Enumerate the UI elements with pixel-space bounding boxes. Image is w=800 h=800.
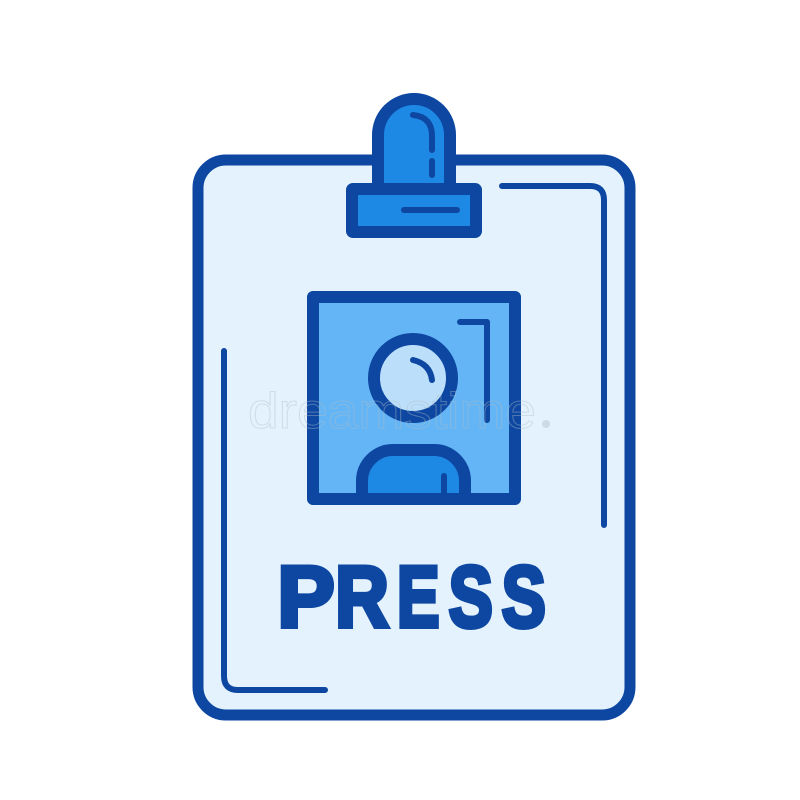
icon: shoulders <box>362 450 465 499</box>
icon: head <box>374 339 452 417</box>
panel: portrait photo <box>313 297 515 499</box>
watermark: dreamstime <box>248 383 536 439</box>
title: PRESS: P <box>278 550 334 646</box>
icon: badge clip <box>352 99 476 232</box>
title: PRESS <box>278 550 546 646</box>
title: PRESS: R <box>335 550 389 646</box>
title: PRESS: S <box>449 550 493 646</box>
panel: badge card <box>198 160 630 715</box>
title: PRESS: E <box>397 550 440 646</box>
title: PRESS: S <box>502 550 546 646</box>
